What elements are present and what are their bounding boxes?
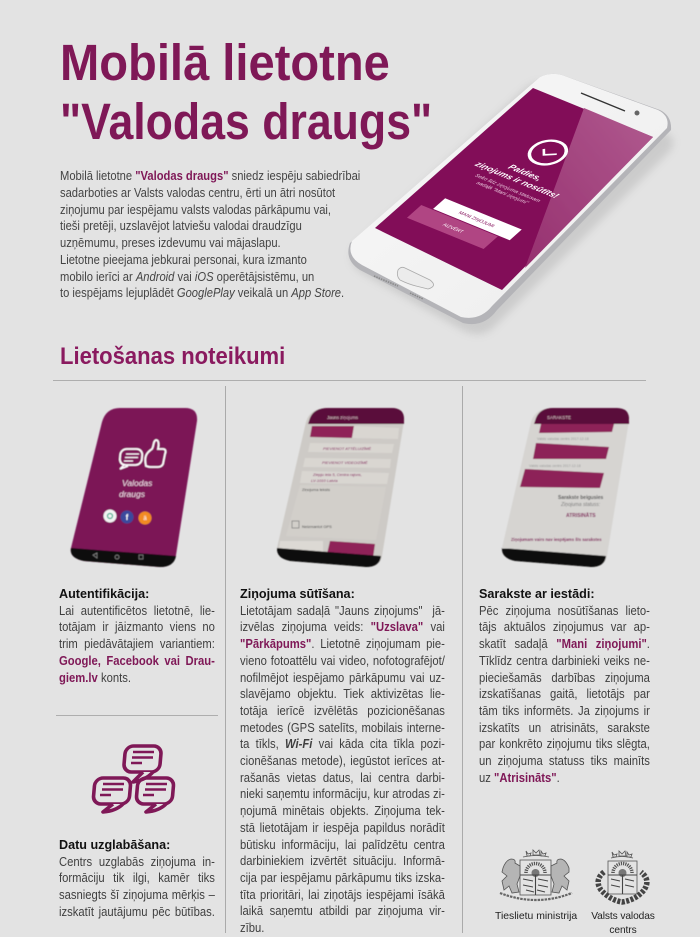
- column 3: correspondence: pieciešamās darbības ziņojuma: [479, 670, 650, 685]
- phone: login: [70, 407, 198, 568]
- phone: correspondence: Sarakste beigusies: [558, 495, 604, 501]
- horizontal rule: [53, 380, 646, 381]
- text: Valsts valodas: [591, 911, 655, 922]
- column 3: correspondence: par konkrēto ziņojumu tiks slēgta,: [479, 736, 650, 751]
- column 2: sending report: Ziņojuma sūtīšana:: [240, 587, 355, 601]
- column 2: sending report: zību.: [240, 920, 264, 935]
- column 3: correspondence: Sarakste ar iestādi:: [479, 587, 595, 601]
- column 1: data storage: [59, 838, 215, 919]
- column 3: correspondence: Pēc ziņojuma nosūtīšanas lieto-: [479, 603, 650, 618]
- column 1: authentication: [59, 587, 215, 685]
- title: "Valodas draugs": [60, 93, 432, 150]
- column 2: sending report: slavējamo objektu. Tiek aktivizētas lie-: [240, 686, 445, 701]
- column 1: authentication: Lai autentificētos lietotnē, lie-: [59, 603, 215, 618]
- column 2: sending report: nofilmējot iespējamo pārkāpumu vai uz-: [240, 670, 445, 685]
- column 2: sending report: izvēlas ziņojuma veids: "Uzslava" vai: [240, 619, 445, 634]
- section heading: Lietošanas noteikumi: [60, 343, 285, 370]
- intro text: Mobilā lietotne "Valodas draugs" sniedz iespēju sabiedrībai: [60, 169, 360, 183]
- column 3: correspondence: tājs aktuālos ziņojumus var ap-: [479, 619, 650, 634]
- column 1: data storage: izskatīt jautājumu pēc būtības.: [59, 904, 215, 919]
- column 2: sending report: totāja ierīcē izvēlētās pozicionēšanas: [240, 703, 445, 718]
- speaker: [581, 93, 625, 111]
- column 2: sending report: metodes (GPS satelīts, mobilais interne-: [240, 720, 445, 735]
- column 3: correspondence: izskatīts un atrisināts, sarakste: [479, 720, 650, 735]
- home button: [397, 267, 434, 289]
- intro text: tieši pretēji, uzslavējot latviešu valodai draudzīgu: [60, 219, 302, 233]
- column 2: sending report: stā lietotājam ir iespēja papildus norādīt: [240, 820, 445, 835]
- logo: Ministry of Justice: [500, 849, 572, 902]
- column 1: data storage: Datu uzglabāšana:: [59, 838, 170, 852]
- title: Mobilā lietotne: [60, 34, 390, 91]
- phone: login: Valodas: [122, 478, 153, 488]
- intro text: Lietotne pieejama jebkurai personai, kura izmanto: [60, 253, 307, 267]
- phone: report form: PIEVIENOT VIDEO/ZĪMĒ: [322, 460, 368, 465]
- text: centrs: [609, 924, 637, 936]
- phone: report form: [276, 407, 405, 568]
- column 2: sending report: nieki saņemtu informāciju, kur atrodas zi-: [240, 786, 445, 801]
- column 2: sending report: darbiniekiem izvērtēt situāciju. Informā-: [240, 853, 445, 868]
- column 1: authentication: Autentifikācija:: [59, 587, 149, 601]
- column 1: data storage: sasniegts šī ziņojuma mērķis –: [59, 887, 215, 902]
- column 2: sending report: "Pārkāpums". Lietotnē ziņojumam pie-: [240, 636, 445, 651]
- column 3: correspondence: Tīklīdz centra darbinieki veiks ne-: [479, 653, 650, 668]
- column 2: sending report: ta tīkls, Wi-Fi vai kāda cita tīkla pozi-: [240, 736, 445, 751]
- column 2: sending report: cija par iespējamu pārkāpumu tiks izska-: [240, 870, 445, 885]
- phone: correspondence: SARAKSTE: [547, 415, 571, 420]
- column 3: correspondence: skatīt sadaļā "Mani ziņojumi".: [479, 636, 650, 651]
- column 1: authentication: trim piedāvātajiem variantiem:: [59, 636, 215, 651]
- phone: report form: Jauns ziņojums: [327, 415, 359, 420]
- phone: login: draugs: [119, 489, 146, 499]
- phone: report form: LV-1010 Latvia: [311, 478, 338, 483]
- column 3: correspondence: tām tiks informēts. Ja ziņojums ir: [479, 703, 650, 718]
- phone: report form: Neizmantot GPS: [302, 524, 332, 529]
- intro text: uzņēmumu, preses izdevumu vai mājaslapu.: [60, 236, 281, 250]
- column 2: sending report: ņojumā minētais objekts. Ziņojuma tek-: [240, 803, 445, 818]
- phone: report form: PIEVIENOT ATTĒLU/ZĪMĒ: [323, 446, 371, 451]
- screen: AIZVĒRT: [441, 222, 465, 235]
- column 1: authentication: totājam ir jāizmanto viens no: [59, 619, 215, 634]
- phone: report form: Ziepju iela 5, Centra rajons,: [312, 472, 362, 477]
- phone: report form: Ziņojuma teksts: [302, 487, 330, 492]
- column 2: sending report: Lietotājam sadaļā "Jauns ziņojums" jā-: [240, 603, 445, 618]
- column 1: data storage: formāciju tik ilgi, kamēr tiks: [59, 870, 215, 885]
- column 3: correspondence: [479, 587, 650, 785]
- screen: Seko līdz ziņojuma statusam: [473, 173, 542, 204]
- column 2: sending report: cionēšanas metode), iegūstot ierīces at-: [240, 753, 445, 768]
- column 1: data storage: Centrs uzglabās ziņojuma in-: [59, 854, 215, 869]
- screen: sadaļā "Mani ziņojumi": [474, 181, 531, 206]
- column 2: sending report: tīta prioritāri, lai ziņotājs iespējami īsākā: [240, 887, 445, 902]
- intro text: [60, 169, 360, 300]
- phone: correspondence: Ziņojuma statuss:: [560, 502, 601, 508]
- column 3: correspondence: un ziņojuma statuss tiks mainīts: [479, 753, 650, 768]
- screen: Paldies,: [506, 163, 545, 182]
- screen: ziņojums ir nosūtīts!: [472, 160, 561, 200]
- column 2: sending report: vieno fotoattēlu vai video, nofotografējot/: [240, 653, 445, 668]
- hero phone illustration: [348, 74, 674, 336]
- column 1: authentication: Google, Facebook vai Drau-: [59, 653, 215, 668]
- intro text: mobilo ierīci ar Android vai iOS operētājsistēmu, un: [60, 270, 314, 284]
- column 2: sending report: [240, 587, 445, 935]
- intro text: ziņojumu par iespējamu valsts valodas pārkāpumu vai,: [60, 202, 331, 216]
- intro text: sadarboties ar Valsts valodas centru, ērti un ātri nosūtot: [60, 186, 335, 200]
- logo captions: Tieslietu ministrija: [495, 911, 577, 922]
- phone: correspondence: Valsts valodas centrs 2017-12-18: [529, 464, 581, 468]
- column 1: authentication: giem.lv konts.: [59, 670, 131, 685]
- phone: login: f: [126, 513, 129, 522]
- title: [60, 34, 432, 150]
- phone: correspondence: [501, 407, 630, 568]
- column 3: correspondence: izskatīšanas gaitā, lietotājs par: [479, 686, 650, 701]
- phone: login: ä: [143, 516, 147, 522]
- phone: correspondence: Valsts valodas centrs 2017-12-18: [537, 437, 589, 441]
- phone: correspondence: Ziņojumam vairs nav iespējams šīs sarakstes: [511, 537, 602, 542]
- screen: [375, 88, 653, 290]
- screen: MANI ZIŅOJUMI: [457, 211, 496, 229]
- column 2: sending report: rašanās vietas datus, lai centra darbi-: [240, 770, 445, 785]
- intro text: to iespējams lejuplādēt GooglePlay veikalā un App Store.: [60, 286, 344, 300]
- column 2: sending report: būtisku informāciju, lai palīdzētu centra: [240, 837, 445, 852]
- logo: State Language Centre: [595, 850, 650, 905]
- column 2: sending report: laikā saņemtu atbildi par ziņojuma vir-: [240, 903, 445, 918]
- column 3: correspondence: uz "Atrisināts".: [479, 770, 560, 785]
- phone: correspondence: ATRISINĀTS: [566, 512, 596, 519]
- icon: speech bubbles: [92, 744, 176, 814]
